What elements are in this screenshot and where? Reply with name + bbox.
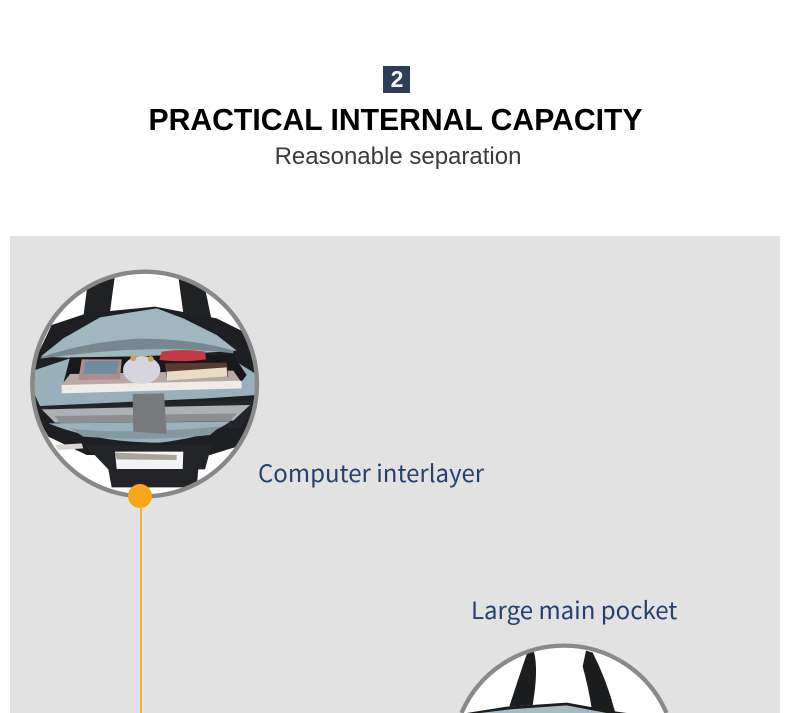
subtitle: Reasonable separation [275,143,521,170]
connector dot [128,484,152,508]
icon: round photo of bag showing large main pocket [460,644,668,713]
panel: grey feature background [10,236,780,713]
connector line [140,500,142,713]
number badge: 2 [391,66,403,92]
number badge [383,66,410,93]
label: computer interlayer: Computer interlayer [258,454,484,489]
title: PRACTICAL INTERNAL CAPACITY [148,104,642,137]
label: large main pocket: Large main pocket [471,591,677,626]
icon: round photo of bag interior showing computer interlayer [30,270,260,498]
